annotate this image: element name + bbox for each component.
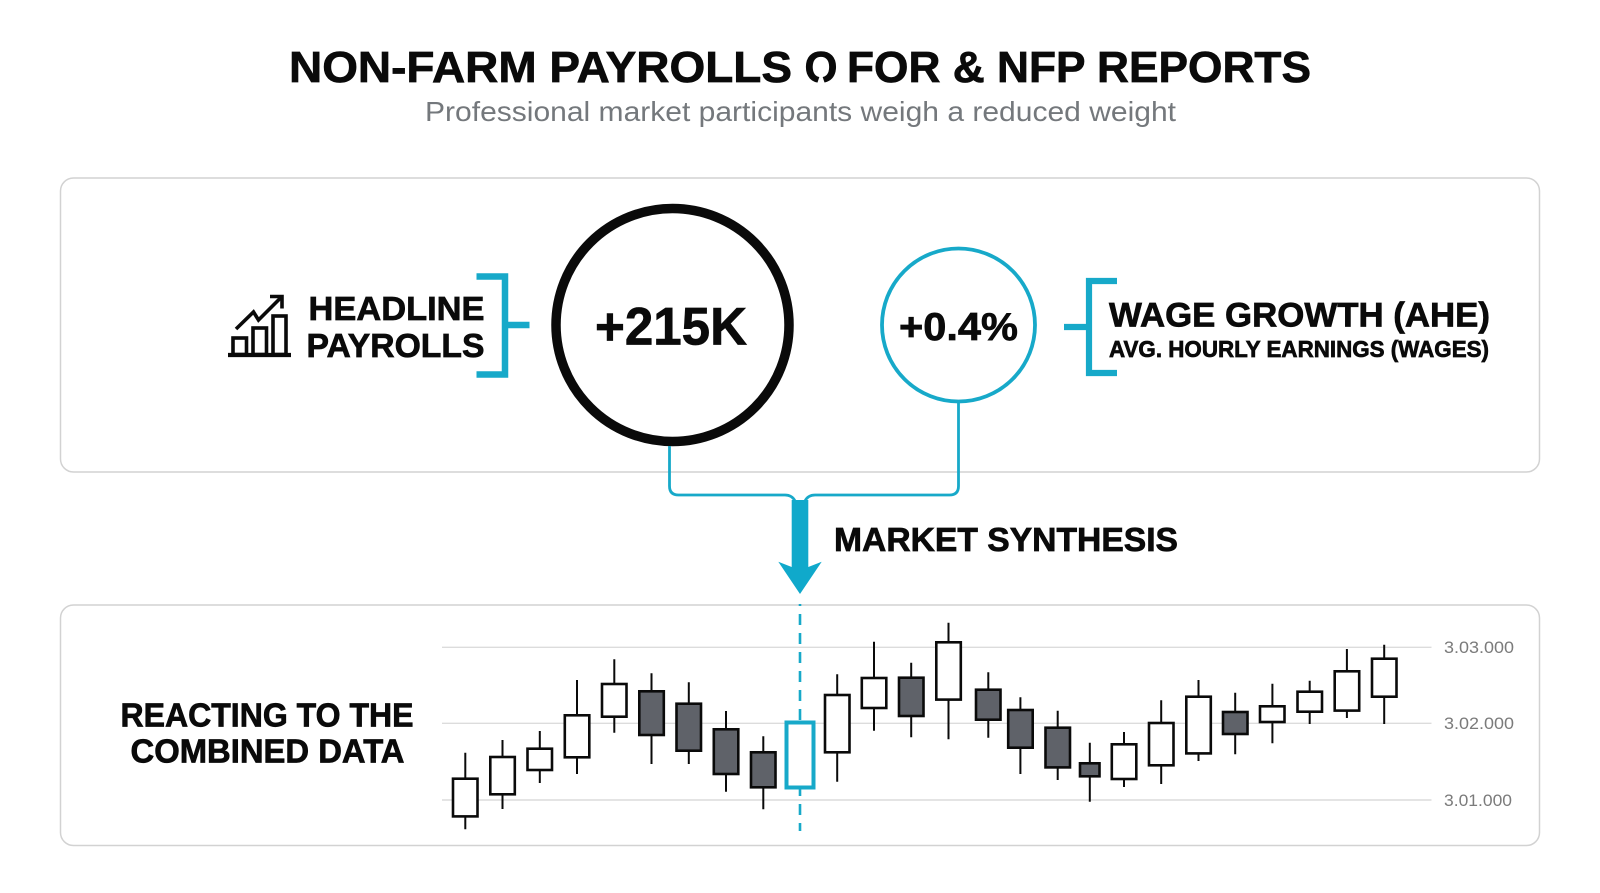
- label: headline payrolls: [306, 291, 484, 365]
- title: O: [804, 43, 838, 92]
- grid lines and price axis: 3.01.000: [1444, 792, 1512, 810]
- title: NON-FARM PAYROLLS: [289, 43, 792, 92]
- subtitle: Professional market participants weigh a reduced weight: [425, 96, 1176, 127]
- label: wage growth: [1109, 296, 1490, 362]
- circle: headline value: [556, 208, 789, 442]
- grid lines and price axis: [442, 639, 1514, 810]
- grid lines and price axis: 3.03.000: [1444, 639, 1514, 657]
- label: wage growth: AVG. HOURLY EARNINGS (WAGES): [1109, 336, 1489, 362]
- circle: wage value: +0.4%: [899, 306, 1018, 349]
- bracket: wage growth: [1064, 281, 1117, 373]
- candlestick chart: [442, 623, 1514, 829]
- grid lines and price axis: 3.02.000: [1444, 715, 1514, 733]
- reaction marker: dashed line and highlighted candle: [786, 604, 814, 831]
- title: [289, 43, 1311, 92]
- label: market synthesis: MARKET SYNTHESIS: [834, 522, 1178, 559]
- bracket: headline payrolls: [476, 276, 530, 374]
- panel: data releases: [60, 178, 1540, 472]
- title: FOR & NFP REPORTS: [847, 43, 1311, 92]
- circle: wage value: [882, 248, 1035, 402]
- label: reacting to the combined data: [120, 696, 414, 770]
- white candle bodies: [453, 642, 1396, 816]
- circle: headline value: +215K: [595, 298, 747, 356]
- arrow: market synthesis: [778, 500, 822, 594]
- label: reacting to the combined data: REACTING TO THE: [120, 696, 414, 734]
- label: headline payrolls: PAYROLLS: [306, 328, 484, 365]
- dark candle bodies: [639, 678, 1248, 787]
- label: reacting to the combined data: COMBINED DATA: [130, 732, 404, 770]
- candle wicks: [465, 623, 1384, 829]
- label: headline payrolls: HEADLINE: [308, 291, 484, 328]
- connector lines: [670, 403, 958, 501]
- label: wage growth: WAGE GROWTH (AHE): [1109, 296, 1490, 334]
- panel: price chart: [60, 605, 1540, 846]
- icon: rising bar chart: [228, 296, 291, 355]
